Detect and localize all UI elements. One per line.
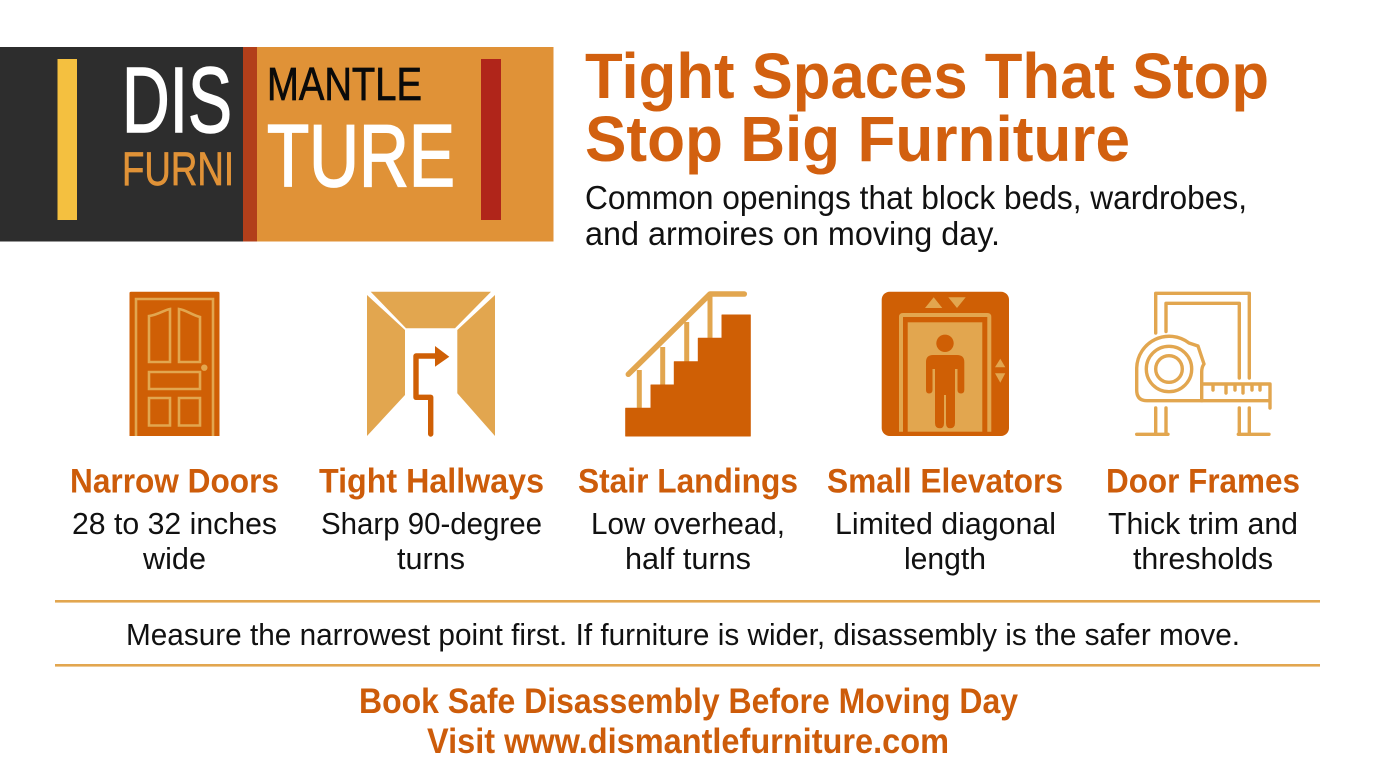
item: tight hallways: Tight Hallways bbox=[319, 462, 544, 500]
item: tight hallways: turns bbox=[397, 541, 465, 576]
title bbox=[585, 40, 1269, 175]
logo banner: MANTLE bbox=[267, 58, 422, 110]
logo banner: DIS bbox=[122, 48, 232, 152]
item: door frames: thresholds bbox=[1133, 541, 1273, 576]
item: small elevators: Limited diagonal bbox=[835, 506, 1056, 541]
icon: door frame and tape measure bbox=[1137, 293, 1270, 434]
measuring tip: Measure the narrowest point first. If furniture is wider, disassembly is the safer move. bbox=[126, 617, 1240, 652]
item: small elevators: length bbox=[904, 541, 986, 576]
call to action bbox=[359, 682, 1018, 761]
item: door frames bbox=[1106, 462, 1300, 576]
subtitle: and armoires on moving day. bbox=[585, 215, 1000, 252]
item: tight hallways: Sharp 90-degree bbox=[321, 506, 542, 541]
item: stair landings: Low overhead, bbox=[591, 506, 785, 541]
title: Tight Spaces That Stop bbox=[585, 40, 1269, 112]
logo banner bbox=[0, 47, 554, 242]
item: small elevators bbox=[827, 462, 1063, 576]
icon: door bbox=[130, 292, 220, 436]
item: small elevators: Small Elevators bbox=[827, 462, 1063, 500]
icon: stairs bbox=[626, 294, 750, 436]
call to action: Book Safe Disassembly Before Moving Day bbox=[359, 682, 1018, 721]
item: tight hallways bbox=[319, 462, 544, 576]
title: Stop Big Furniture bbox=[585, 103, 1130, 175]
item: stair landings bbox=[578, 462, 798, 576]
logo banner: TURE bbox=[267, 106, 455, 205]
item: narrow doors: wide bbox=[142, 541, 206, 576]
item: stair landings: Stair Landings bbox=[578, 462, 798, 500]
call to action: Visit www.dismantlefurniture.com bbox=[427, 722, 949, 761]
item: stair landings: half turns bbox=[625, 541, 751, 576]
item: narrow doors: Narrow Doors bbox=[70, 462, 279, 500]
logo banner: FURNI bbox=[122, 142, 234, 195]
item: narrow doors: 28 to 32 inches bbox=[72, 506, 277, 541]
subtitle bbox=[585, 179, 1247, 252]
item: narrow doors bbox=[70, 462, 279, 576]
subtitle: Common openings that block beds, wardrobes, bbox=[585, 179, 1247, 216]
icon: elevator bbox=[882, 292, 1009, 436]
item: door frames: Door Frames bbox=[1106, 462, 1300, 500]
item: door frames: Thick trim and bbox=[1108, 506, 1298, 541]
icon: hallway bbox=[367, 292, 495, 436]
